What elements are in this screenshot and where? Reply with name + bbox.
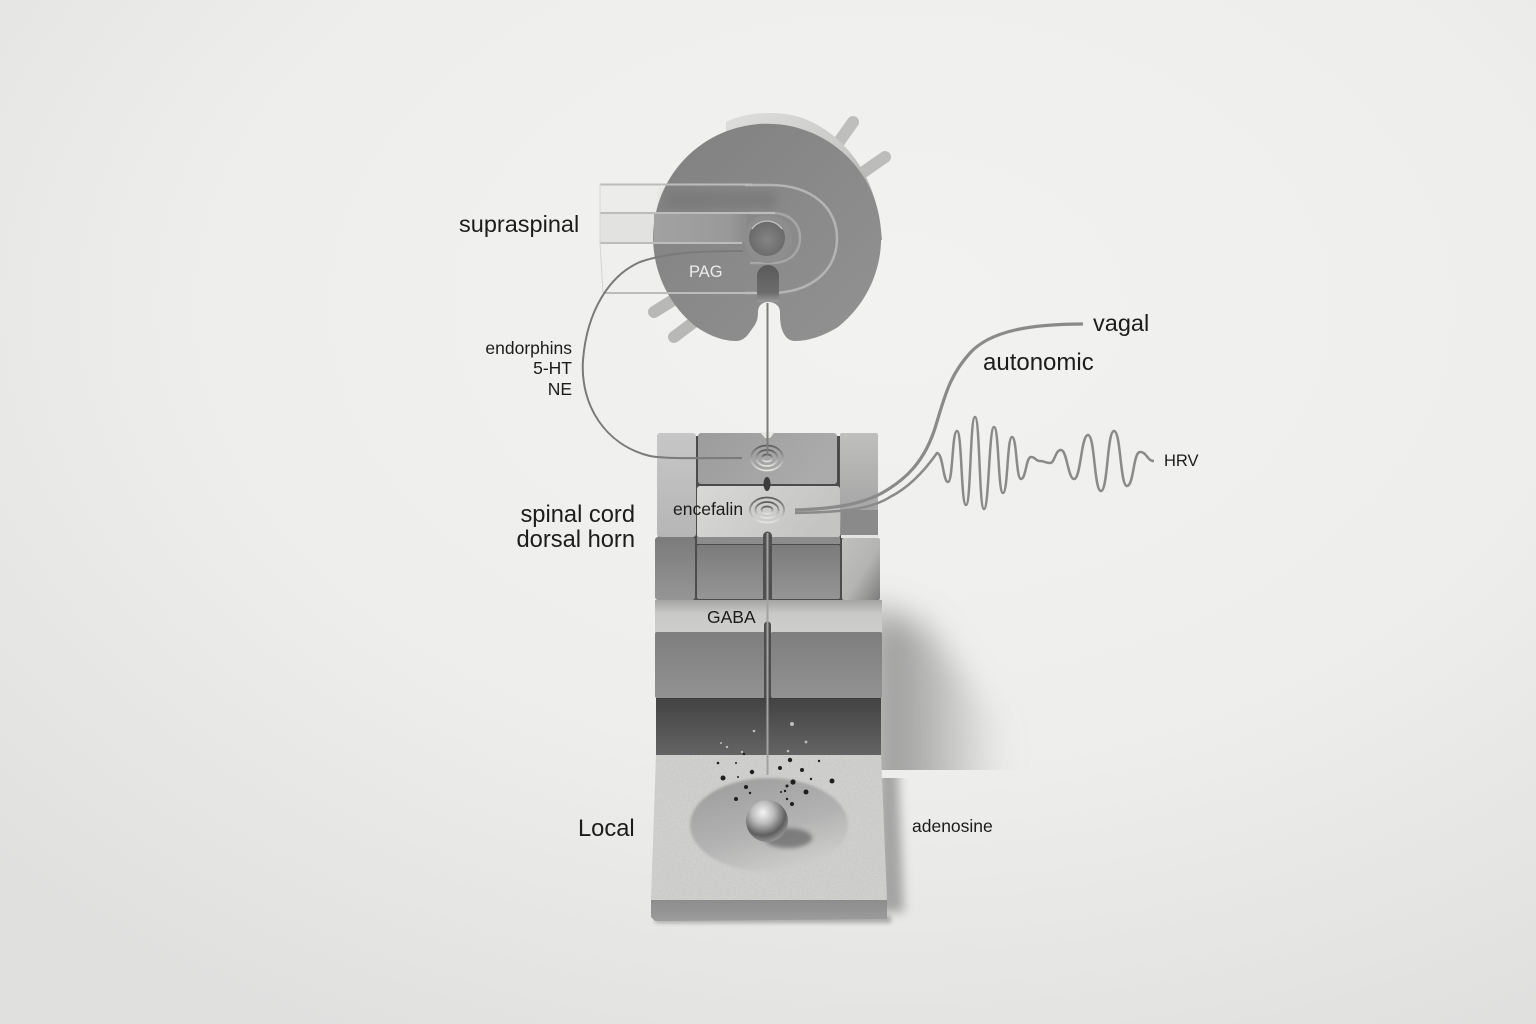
GABA block bbox=[655, 600, 882, 756]
lower middle block bbox=[697, 486, 840, 538]
left column top bbox=[657, 433, 696, 537]
vertical connector bbox=[766, 303, 768, 775]
right front column bbox=[842, 538, 880, 600]
dish bbox=[690, 778, 848, 872]
label: neurotransmitters bbox=[485, 338, 572, 399]
HRV waveform bbox=[795, 417, 1154, 513]
PAG label: PAG bbox=[689, 263, 723, 281]
GABA top face bbox=[655, 600, 882, 633]
GABA front left bbox=[655, 632, 765, 698]
GABA front right bbox=[771, 632, 882, 698]
label: vagal: vagal bbox=[1093, 310, 1149, 336]
disc face bbox=[653, 124, 881, 341]
particles bbox=[717, 753, 834, 806]
label: Local: Local bbox=[578, 816, 635, 842]
left column front bbox=[655, 537, 695, 600]
label: neurotransmitters: NE bbox=[548, 379, 572, 399]
spinal cord block bbox=[655, 432, 880, 600]
cast shadows bbox=[655, 606, 1010, 923]
right dark lower section bbox=[841, 510, 878, 535]
ball shadow bbox=[764, 828, 812, 848]
label: GABA: GABA bbox=[707, 607, 756, 627]
central slot bbox=[757, 265, 779, 302]
metal ball bbox=[746, 800, 788, 842]
base top bbox=[651, 755, 887, 900]
light particles bbox=[720, 722, 807, 753]
GABA groove bbox=[764, 622, 771, 698]
descending curve from PAG to dorsal horn bbox=[583, 251, 743, 458]
right brushed column bbox=[840, 433, 878, 536]
middle front left bbox=[697, 545, 765, 599]
label: spinal cord dorsal horn bbox=[516, 502, 635, 553]
label: autonomic: autonomic bbox=[983, 349, 1094, 376]
label: encefalin: encefalin bbox=[673, 499, 743, 519]
block gaps backdrop bbox=[658, 436, 876, 600]
supraspinal disc assembly bbox=[600, 113, 885, 341]
small slot bbox=[764, 477, 770, 491]
spiral upper bbox=[751, 446, 783, 470]
top notch bbox=[760, 432, 775, 438]
upper middle block bbox=[698, 433, 837, 484]
right joint highlight bbox=[841, 535, 879, 538]
pins bbox=[654, 122, 885, 337]
disc back rim bbox=[726, 113, 882, 240]
label: spinal cord dorsal horn: spinal cord bbox=[520, 502, 635, 528]
middle front right bbox=[771, 545, 840, 599]
vagal autonomic line bbox=[795, 324, 1083, 510]
spiral lower bbox=[750, 498, 784, 522]
label: adenosine: adenosine bbox=[912, 816, 993, 836]
glass channel over disc bbox=[600, 184, 837, 293]
glass panels outside disc bbox=[600, 184, 671, 293]
base front bbox=[651, 899, 887, 921]
central knob bbox=[744, 215, 792, 263]
label: spinal cord dorsal horn: dorsal horn bbox=[516, 527, 635, 553]
middle front step bbox=[697, 537, 840, 544]
dark row bbox=[656, 699, 881, 756]
label: neurotransmitters: 5-HT bbox=[533, 358, 572, 378]
GABA backdrop bbox=[656, 630, 881, 702]
label: supraspinal: supraspinal bbox=[459, 211, 579, 237]
groove bbox=[763, 532, 772, 600]
label: HRV: HRV bbox=[1164, 452, 1199, 470]
label: neurotransmitters: endorphins bbox=[485, 338, 572, 358]
base plate with dish bbox=[651, 722, 887, 921]
